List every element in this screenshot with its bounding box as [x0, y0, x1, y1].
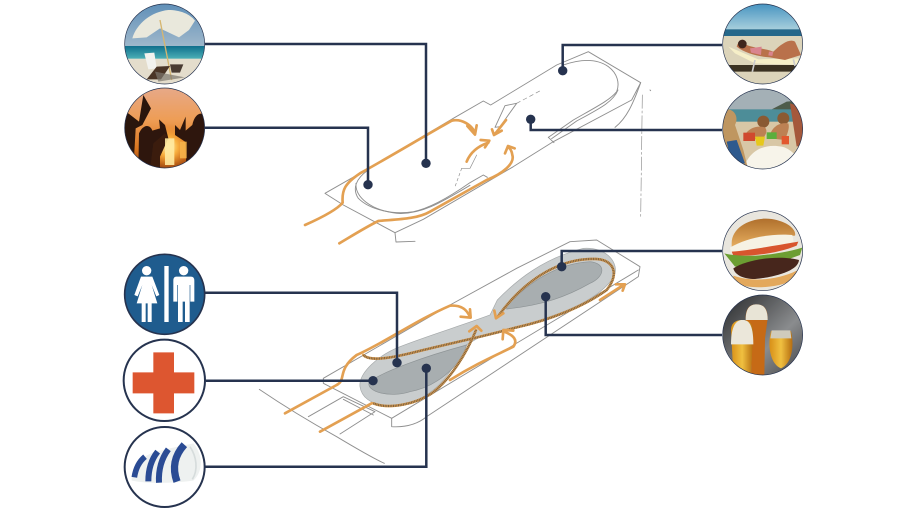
- icon: restrooms: [125, 254, 205, 334]
- leader: towel photo to plan: [205, 364, 431, 467]
- man figure: [173, 266, 194, 322]
- icon: first aid cross: [124, 340, 205, 421]
- flow ribbon and arrows: [285, 259, 625, 432]
- photo: beach umbrella and chair: [122, 3, 208, 85]
- site outline: [325, 52, 651, 242]
- top sketch: beach plan with arrows: [305, 52, 651, 243]
- figure-eight plaza: [360, 248, 615, 406]
- photo: striped beach towel: [125, 427, 205, 507]
- photo: children building sandcastle: [722, 88, 803, 170]
- leader: first aid icon to plan: [206, 376, 378, 385]
- leader: burger photo to plan: [557, 251, 722, 271]
- leader: sunbather photo to plan: [558, 45, 722, 75]
- woman figure: [134, 266, 159, 322]
- photo: beer glasses: [720, 293, 807, 377]
- flow arrows: [305, 120, 515, 243]
- photo: party at sunset: [122, 87, 208, 170]
- leader: beer photo to plan: [541, 292, 722, 335]
- leader: umbrella photo to plan: [205, 44, 431, 168]
- leader: restroom icon to plan: [205, 293, 402, 367]
- site outline: [259, 240, 640, 463]
- leader: sandcastle photo to plan: [526, 115, 722, 130]
- leader: party photo to plan: [205, 128, 373, 189]
- bottom sketch: figure-eight promenade: [259, 240, 640, 463]
- photo: burger: [720, 208, 807, 292]
- photo: sunbather on lounger: [722, 4, 803, 84]
